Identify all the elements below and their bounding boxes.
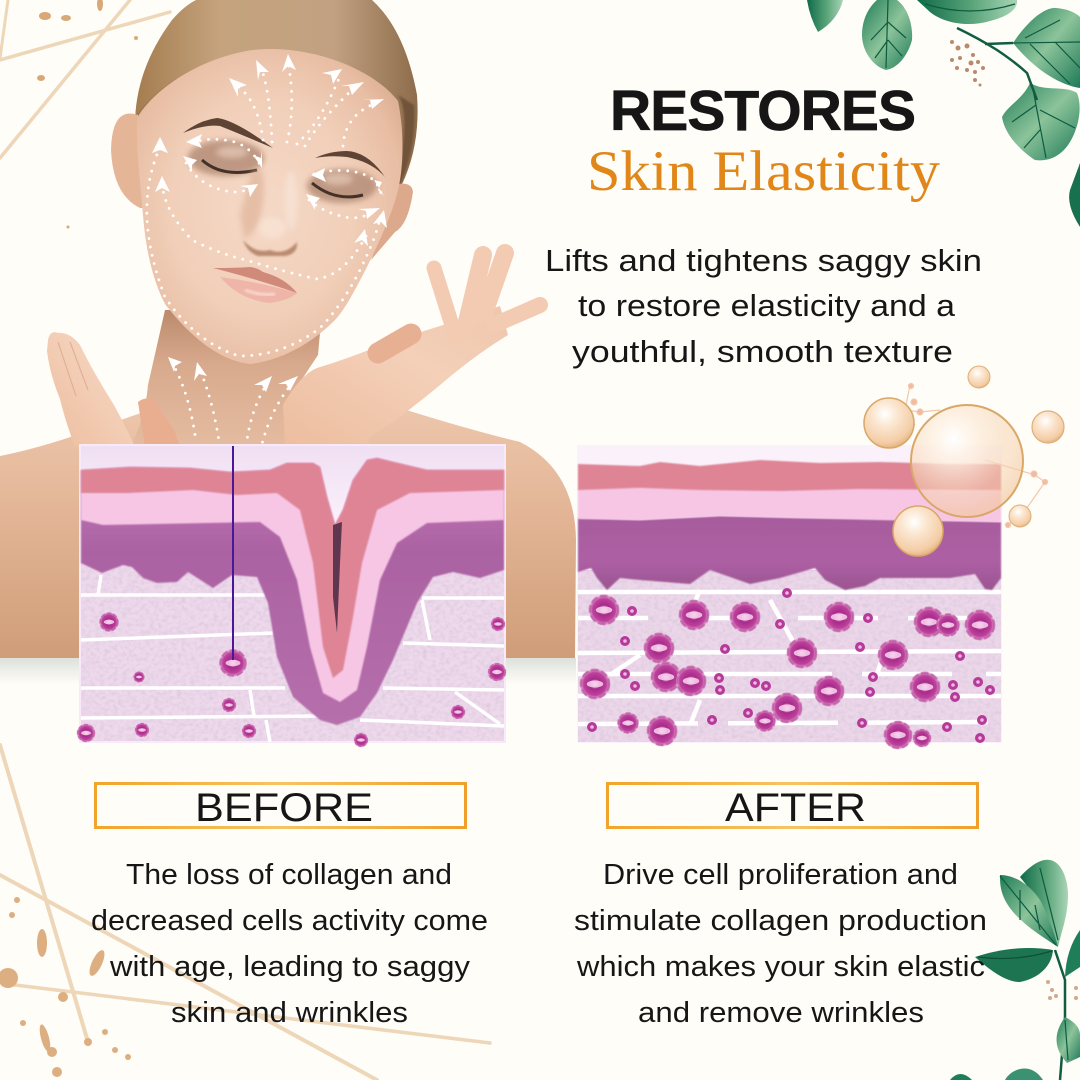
collagen fibre gaps <box>578 590 1001 725</box>
eyes, brows and nose <box>183 118 385 256</box>
leaf <box>1005 1068 1043 1080</box>
leaf <box>1020 860 1068 947</box>
cells <box>77 612 506 747</box>
leaf <box>1057 1017 1080 1063</box>
purple dermis layer <box>81 458 504 725</box>
collagen fibre gaps <box>81 575 504 742</box>
purple dermis layer <box>578 516 1001 590</box>
molecule lines <box>905 384 1048 528</box>
before text block <box>91 859 488 1029</box>
ears <box>111 113 413 260</box>
red surface layer <box>578 460 1001 491</box>
intro text block: Lifts and tightens saggy skin <box>545 243 982 278</box>
left hand <box>47 332 180 447</box>
after label: AFTER <box>725 786 866 830</box>
leaf <box>1069 163 1080 227</box>
decoration: leaves top right <box>807 0 1080 227</box>
panel: before skin cross-section <box>77 444 506 747</box>
red surface layer <box>81 458 504 678</box>
branch <box>1055 950 1065 1080</box>
before label: BEFORE <box>195 786 373 830</box>
face <box>137 49 402 364</box>
leaf <box>950 1074 972 1080</box>
light pink epidermis layer <box>578 488 1001 522</box>
after label <box>608 784 978 830</box>
leaf <box>917 0 1017 24</box>
after text block: and remove wrinkles <box>638 997 924 1029</box>
decoration: leaves bottom right <box>950 860 1080 1080</box>
decoration: gold lines and splatter bottom left <box>0 745 490 1080</box>
tissue layer <box>578 570 1001 742</box>
leaf <box>1013 8 1080 88</box>
leaf <box>1000 875 1058 947</box>
right hand <box>283 253 540 447</box>
after text block: which makes your skin elastic <box>576 951 985 983</box>
title <box>587 79 941 203</box>
massage arrowheads <box>152 54 387 392</box>
decoration: gold lines top left <box>0 0 170 228</box>
shoulders and torso <box>0 395 576 684</box>
title: Skin Elasticity <box>587 140 941 203</box>
after text block: stimulate collagen production <box>574 905 987 937</box>
before text block: decreased cells activity come <box>91 905 488 937</box>
thumb <box>138 398 180 447</box>
seed speckles <box>1046 980 1078 1000</box>
seed speckles <box>950 40 985 86</box>
eye shadow <box>188 140 264 176</box>
top gradient <box>81 446 504 526</box>
title: RESTORES <box>610 79 916 143</box>
leaf <box>1065 930 1080 977</box>
after text block <box>574 859 987 1029</box>
nose shading <box>240 170 264 240</box>
photo: woman <box>0 0 576 684</box>
panel: after skin cross-section <box>577 445 1002 749</box>
before text block: The loss of collagen and <box>126 859 452 891</box>
leaf <box>1002 83 1080 160</box>
before label <box>96 784 466 830</box>
leaf <box>807 0 843 32</box>
intro text block: youthful, smooth texture <box>572 334 953 369</box>
cells <box>580 588 995 749</box>
light pink epidermis layer <box>81 458 504 702</box>
after text block: Drive cell proliferation and <box>603 859 958 891</box>
injection line <box>232 446 234 660</box>
wrinkle <box>333 522 342 633</box>
tissue layer <box>81 560 504 741</box>
massage path dotted lines <box>147 62 381 448</box>
neck <box>130 310 322 447</box>
before text block: with age, leading to saggy <box>109 951 471 983</box>
intro text block <box>545 243 982 369</box>
leaf <box>862 0 912 70</box>
decoration: molecule bubbles <box>864 366 1064 556</box>
leaf <box>975 948 1053 982</box>
hair <box>135 0 418 192</box>
lips <box>213 267 297 303</box>
branch <box>957 28 1037 100</box>
intro text block: to restore elasticity and a <box>578 288 956 323</box>
before text block: skin and wrinkles <box>171 997 408 1029</box>
